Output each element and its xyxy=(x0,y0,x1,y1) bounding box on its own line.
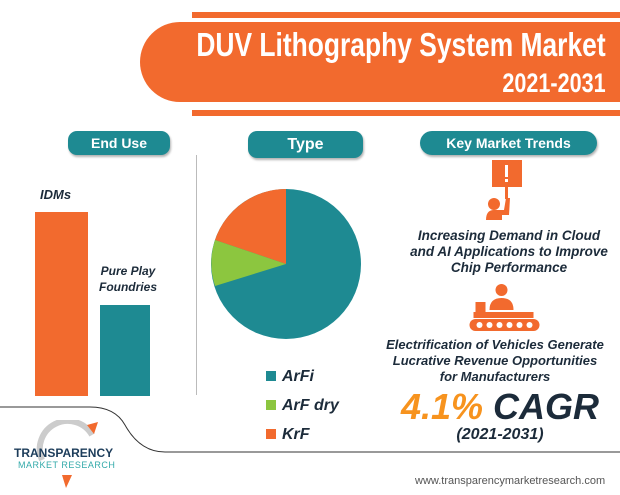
url: www.transparencymarketresearch.com xyxy=(415,475,605,487)
legend: KrF xyxy=(282,426,310,443)
heading: End Use xyxy=(68,131,170,155)
legend: ArF dry xyxy=(282,397,339,414)
bottom curve line xyxy=(0,406,620,452)
title text xyxy=(197,26,606,98)
logo: MARKET RESEARCH xyxy=(18,460,115,470)
heading: Key Market Trends: Key Market Trends xyxy=(446,135,571,151)
bar IDMs xyxy=(35,212,88,396)
icon: conveyor worker xyxy=(470,284,540,331)
heading: Type xyxy=(248,131,363,158)
legend xyxy=(266,368,340,443)
label IDMs: IDMs xyxy=(40,187,71,202)
text: trend 1: Chip Performance xyxy=(451,260,567,275)
pie chart: type xyxy=(211,189,361,339)
icon: alert sign person xyxy=(486,160,522,220)
heading: Type: Type xyxy=(287,136,324,153)
CAGR period: (2021-2031) xyxy=(456,426,544,443)
heading: End Use: End Use xyxy=(91,135,147,151)
title banner xyxy=(140,12,620,116)
title text: DUV Lithography System Market xyxy=(197,26,606,63)
heading: Key Market Trends xyxy=(420,131,597,155)
logo: TRANSPARENCY xyxy=(14,446,113,460)
text: trend 1 xyxy=(410,228,608,275)
text: trend 1: and AI Applications to Improve xyxy=(410,244,608,259)
bar Pure Play xyxy=(100,305,150,396)
text: trend 2: Electrification of Vehicles Generate Lucrative Revenue Opportunities for Manufacturers xyxy=(386,337,604,384)
label Pure Play Foundries: Pure Play Foundries xyxy=(99,264,157,294)
CAGR: 4.1% CAGR xyxy=(401,386,599,427)
logo xyxy=(14,420,115,488)
bar chart: end use xyxy=(35,187,157,396)
text: trend 1: Increasing Demand in Cloud xyxy=(418,228,600,243)
legend: ArFi xyxy=(282,368,314,385)
title text: 2021-2031 xyxy=(503,68,606,98)
